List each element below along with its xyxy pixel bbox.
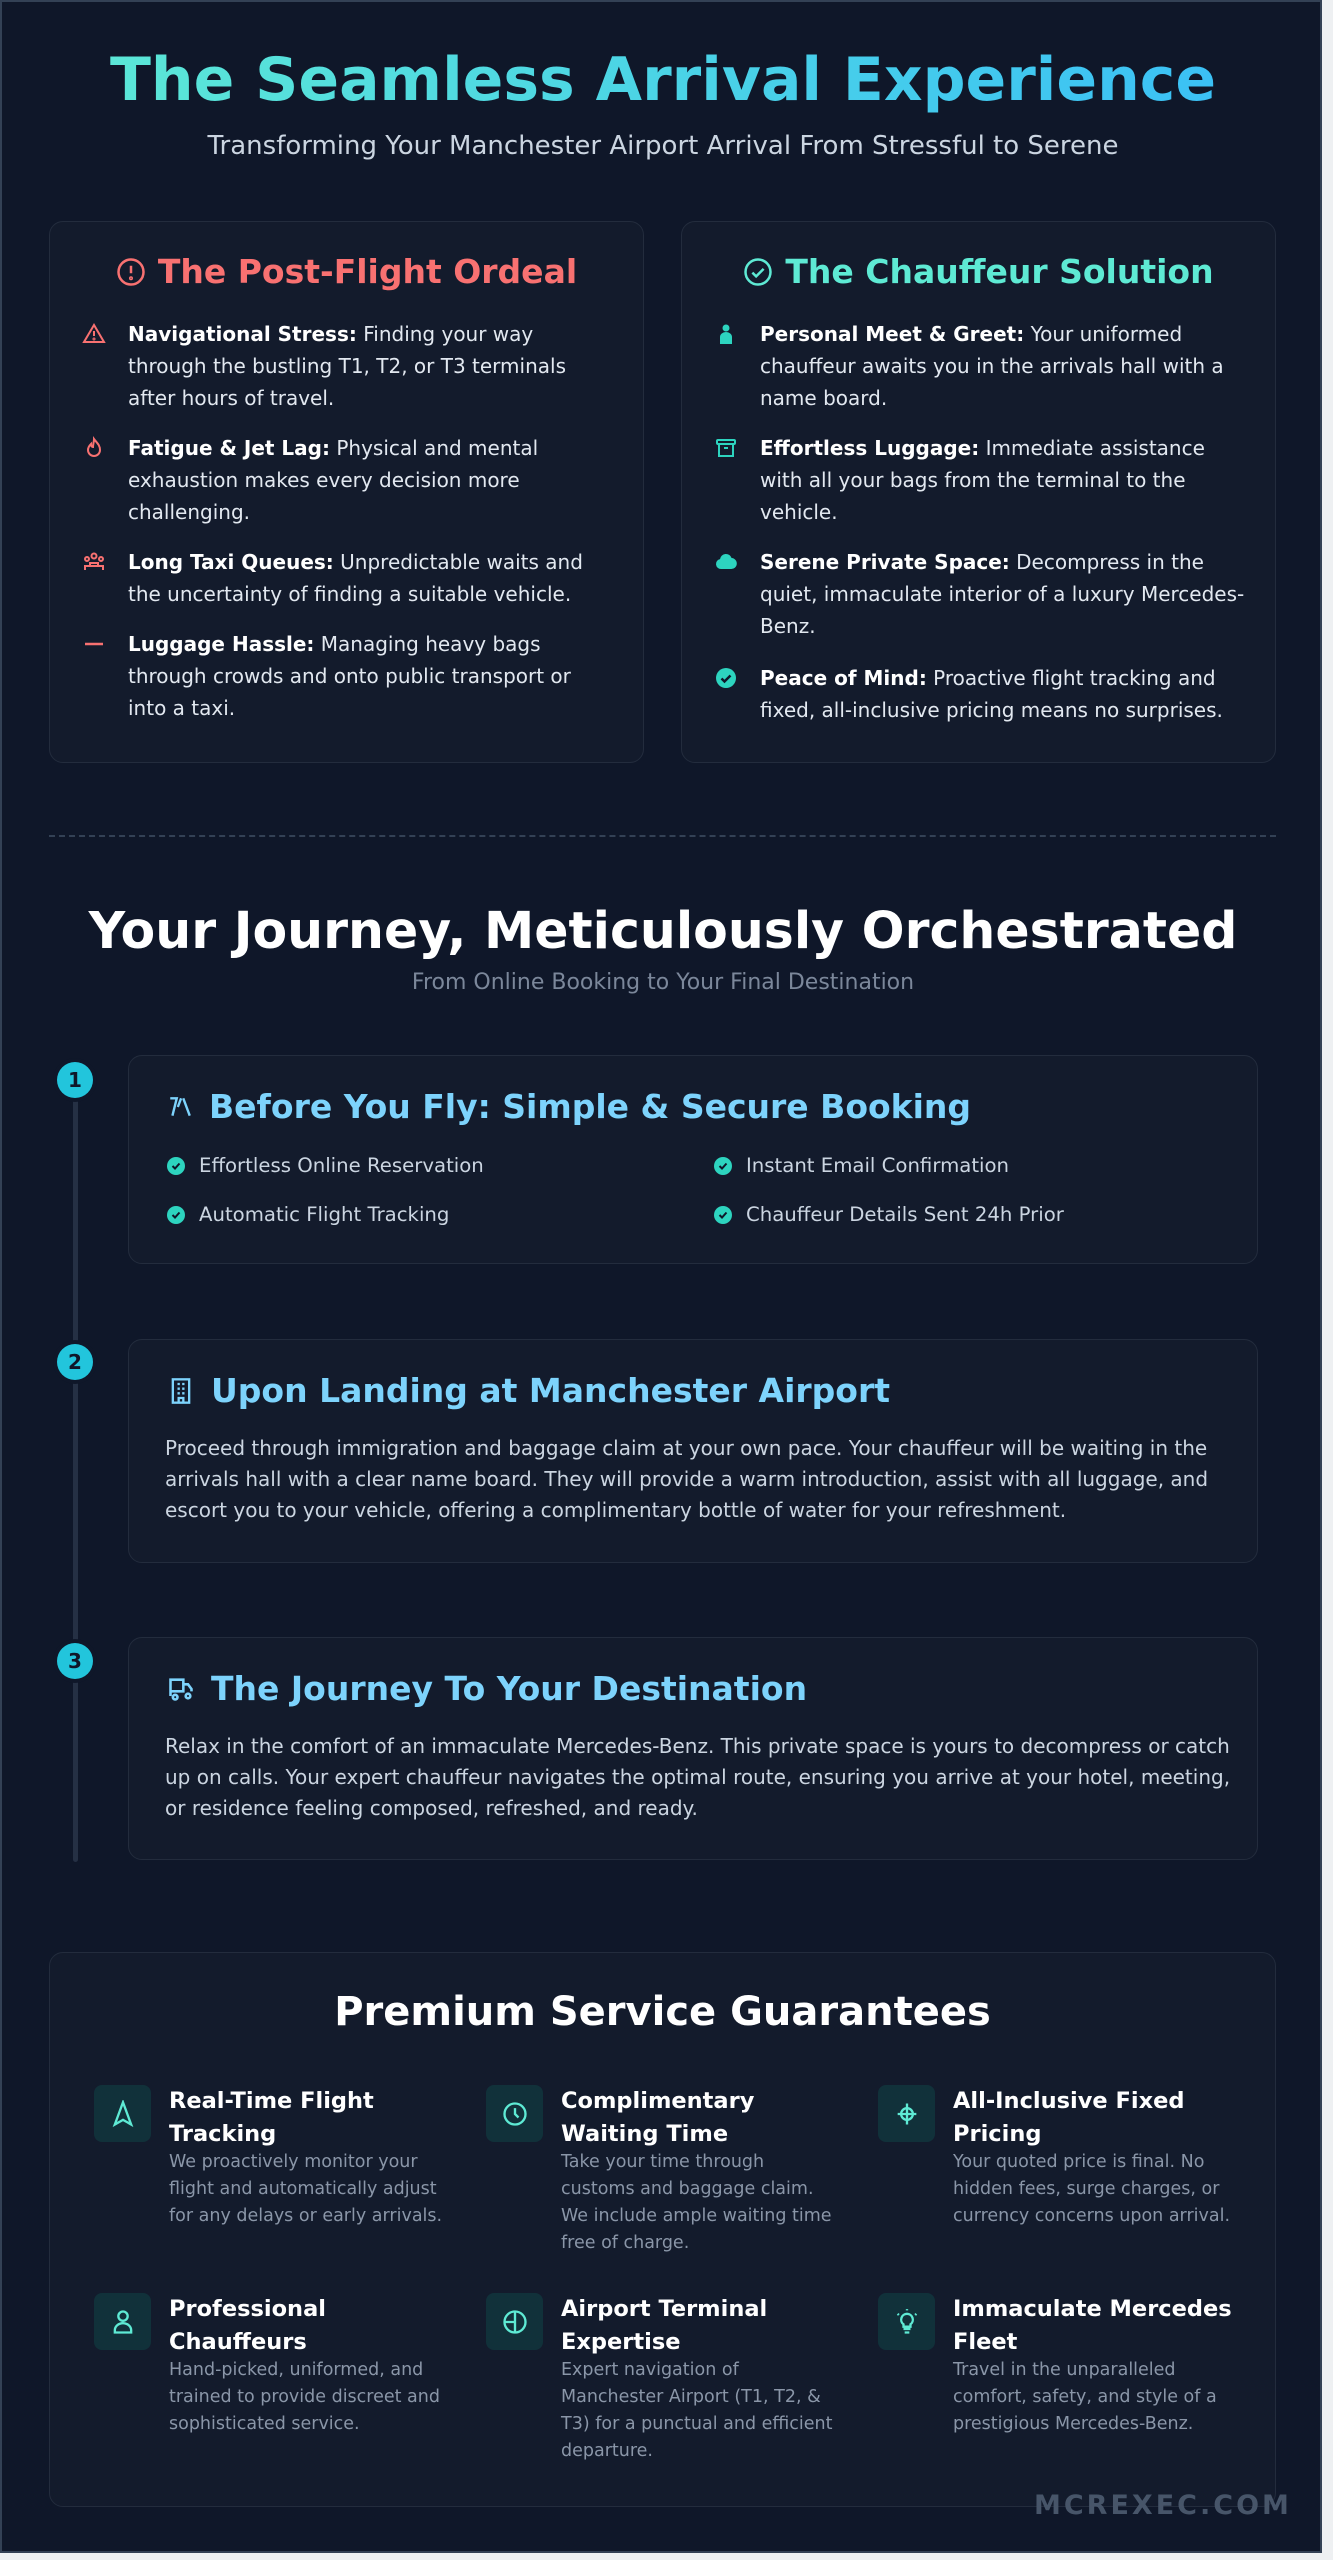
panel: post-flight ordeal (49, 221, 644, 763)
item: luggage: Effortless Luggage: Immediate assistance with all your bags from the terminal to the vehicle. (760, 436, 1205, 524)
guarantees heading: Premium Service Guarantees (334, 1989, 991, 2035)
guarantee: terminal expertise: Airport Terminal (561, 2296, 767, 2322)
section subtitle: From Online Booking to Your Final Destination (412, 970, 914, 995)
checklist: Chauffeur Details Sent 24h Prior (746, 1203, 1064, 1226)
section heading: journey: Your Journey, Meticulously Orchestrated (89, 901, 1237, 960)
guarantee: terminal expertise (486, 2293, 833, 2461)
guarantee: chauffeurs: Professional (169, 2296, 326, 2322)
guarantee: flight tracking: Real-Time Flight (169, 2088, 374, 2114)
guarantee: pricing: All-Inclusive Fixed (953, 2088, 1184, 2114)
step number 1: 1 (68, 1068, 82, 1092)
card: before you fly (128, 1055, 1258, 1264)
guarantee: pricing: Your quoted price is final. No hidden fees, surge charges, or currency concerns upon arrival. (953, 2152, 1230, 2226)
step number 3: 3 (68, 1649, 82, 1673)
guarantee: waiting time: Waiting Time (561, 2121, 728, 2147)
guarantee: flight tracking (94, 2085, 442, 2226)
heading: solution: The Chauffeur Solution (785, 252, 1214, 291)
card text: Proceed through immigration and baggage claim at your own pace. Your chauffeur will be waiting in the arrivals hall with a clear name board. They will provide a warm introduction, assist with all luggage, and escort you to your vehicle, offering a complimentary bottle of water for your refreshment. (165, 1436, 1208, 1522)
card heading: The Journey To Your Destination (211, 1669, 807, 1708)
guarantee: terminal expertise: Expertise (561, 2329, 680, 2355)
watermark: MCREXEC.COM (1034, 2490, 1292, 2521)
title: The Seamless Arrival Experience (110, 45, 1216, 115)
card: upon landing (128, 1339, 1258, 1563)
subtitle: Transforming Your Manchester Airport Arrival From Stressful to Serene (207, 131, 1119, 161)
guarantee: chauffeurs (94, 2293, 440, 2434)
step number 3 (57, 1643, 93, 1679)
card heading: Upon Landing at Manchester Airport (211, 1371, 890, 1410)
step number 2 (57, 1344, 93, 1380)
guarantee: terminal expertise: Expert navigation of Manchester Airport (T1, T2, & T3) for a punctual and efficient departure. (561, 2360, 833, 2461)
panel: guarantees (49, 1952, 1276, 2507)
guarantee: flight tracking: We proactively monitor your flight and automatically adjust for any delays or early arrivals. (169, 2152, 442, 2226)
item: taxi queues: Long Taxi Queues: Unpredictable waits and the uncertainty of finding a suitable vehicle. (128, 550, 583, 606)
step number 1 (57, 1062, 93, 1098)
guarantee: waiting time: Complimentary (561, 2088, 754, 2114)
item: navigational stress: Navigational Stress: Finding your way through the bustling T1, T2, or T3 terminals after hours of travel. (128, 322, 566, 410)
guarantee: waiting time (486, 2085, 832, 2253)
panel: chauffeur solution (681, 221, 1276, 763)
step number 2: 2 (68, 1350, 82, 1374)
item: meet & greet: Personal Meet & Greet: Your uniformed chauffeur awaits you in the arrivals hall with a name board. (760, 322, 1224, 410)
guarantee: chauffeurs: Hand-picked, uniformed, and trained to provide discreet and sophisticated service. (169, 2360, 440, 2434)
timeline line (73, 1062, 78, 1862)
card text: Relax in the comfort of an immaculate Mercedes-Benz. This private space is yours to decompress or catch up on calls. Your expert chauffeur navigates the optimal route, ensuring you arrive at your hotel, meeting, or residence feeling composed, refreshed, and ready. (165, 1734, 1230, 1820)
guarantee: pricing: Pricing (953, 2121, 1041, 2147)
checklist: Effortless Online Reservation (199, 1154, 484, 1177)
checklist: Automatic Flight Tracking (199, 1203, 449, 1226)
item: luggage hassle: Luggage Hassle: Managing heavy bags through crowds and onto public transport or into a taxi. (128, 632, 571, 720)
item: peace of mind: Peace of Mind: Proactive flight tracking and fixed, all-inclusive pricing means no surprises. (760, 666, 1223, 722)
guarantee: flight tracking: Tracking (169, 2121, 276, 2147)
guarantee: waiting time: Take your time through customs and baggage claim. We include ample waiting time free of charge. (561, 2152, 832, 2253)
guarantee: fleet: Immaculate Mercedes (953, 2296, 1232, 2322)
guarantee: chauffeurs: Chauffeurs (169, 2329, 307, 2355)
card heading: Before You Fly: Simple & Secure Booking (209, 1087, 971, 1126)
item: private space: Serene Private Space: Decompress in the quiet, immaculate interior of a luxury Mercedes-Benz. (760, 550, 1244, 638)
card: journey (128, 1637, 1258, 1860)
checklist: Instant Email Confirmation (746, 1154, 1009, 1177)
heading: ordeal: The Post-Flight Ordeal (158, 252, 577, 291)
title (2, 38, 1324, 122)
guarantee: fleet: Travel in the unparalleled comfort, safety, and style of a prestigious Mercedes-Benz. (953, 2360, 1217, 2434)
guarantee: fleet (878, 2293, 1232, 2434)
item: fatigue: Fatigue & Jet Lag: Physical and mental exhaustion makes every decision more challenging. (128, 436, 538, 524)
guarantee: pricing (878, 2085, 1230, 2226)
checklist (167, 1154, 1064, 1226)
guarantee: fleet: Fleet (953, 2329, 1017, 2355)
